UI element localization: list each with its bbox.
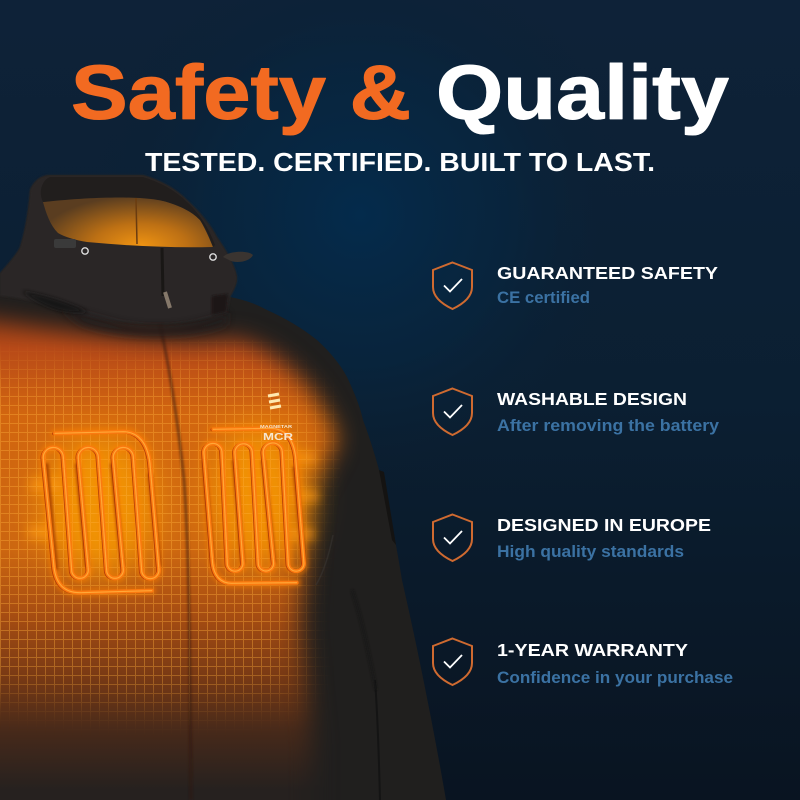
feature: guaranteed safety [433, 262, 718, 309]
title: Quality [436, 50, 729, 136]
title: Safety & [71, 50, 411, 136]
horizontal glow streaks [28, 452, 318, 540]
zipper [162, 248, 163, 296]
heated panel [0, 290, 380, 800]
heading: GUARANTEED SAFETY [497, 263, 718, 283]
heading: 1-YEAR WARRANTY [497, 640, 688, 660]
coil glow [42, 425, 306, 575]
heading: DESIGNED IN EUROPE [497, 515, 711, 535]
description: CE certified [497, 288, 590, 307]
description: Confidence in your purchase [497, 668, 733, 687]
heat grid [0, 340, 340, 740]
icon: shield check [433, 388, 472, 435]
feature: washable design [433, 388, 720, 435]
hood toggles [54, 239, 253, 262]
icon: shield check [433, 514, 472, 561]
jacket logo: MCR [263, 432, 294, 443]
subtitle: TESTED. CERTIFIED. BUILT TO LAST. [145, 147, 655, 177]
icon: shield check [433, 638, 472, 685]
hood [0, 175, 237, 323]
jacket logo: MAGNETAR [260, 424, 293, 429]
heading: WASHABLE DESIGN [497, 389, 687, 409]
icon: shield check [433, 262, 472, 309]
title [71, 50, 729, 136]
under-hood shadow [60, 308, 228, 336]
hood opening [43, 197, 213, 247]
feature: warranty [433, 638, 733, 687]
sleeve pocket [379, 470, 396, 545]
description: After removing the battery [497, 416, 720, 435]
jacket body [0, 175, 446, 800]
collar folds [22, 291, 88, 313]
jacket illustration [0, 175, 446, 800]
feature: designed in europe [433, 514, 711, 561]
right heating coil [203, 428, 304, 584]
jacket logo [260, 394, 294, 443]
hood inner lining [41, 177, 215, 247]
description: High quality standards [497, 542, 684, 561]
zipper seam [160, 325, 191, 800]
left heating coil [42, 432, 159, 593]
coil dark channels [46, 460, 304, 570]
sleeve folds [375, 680, 380, 800]
